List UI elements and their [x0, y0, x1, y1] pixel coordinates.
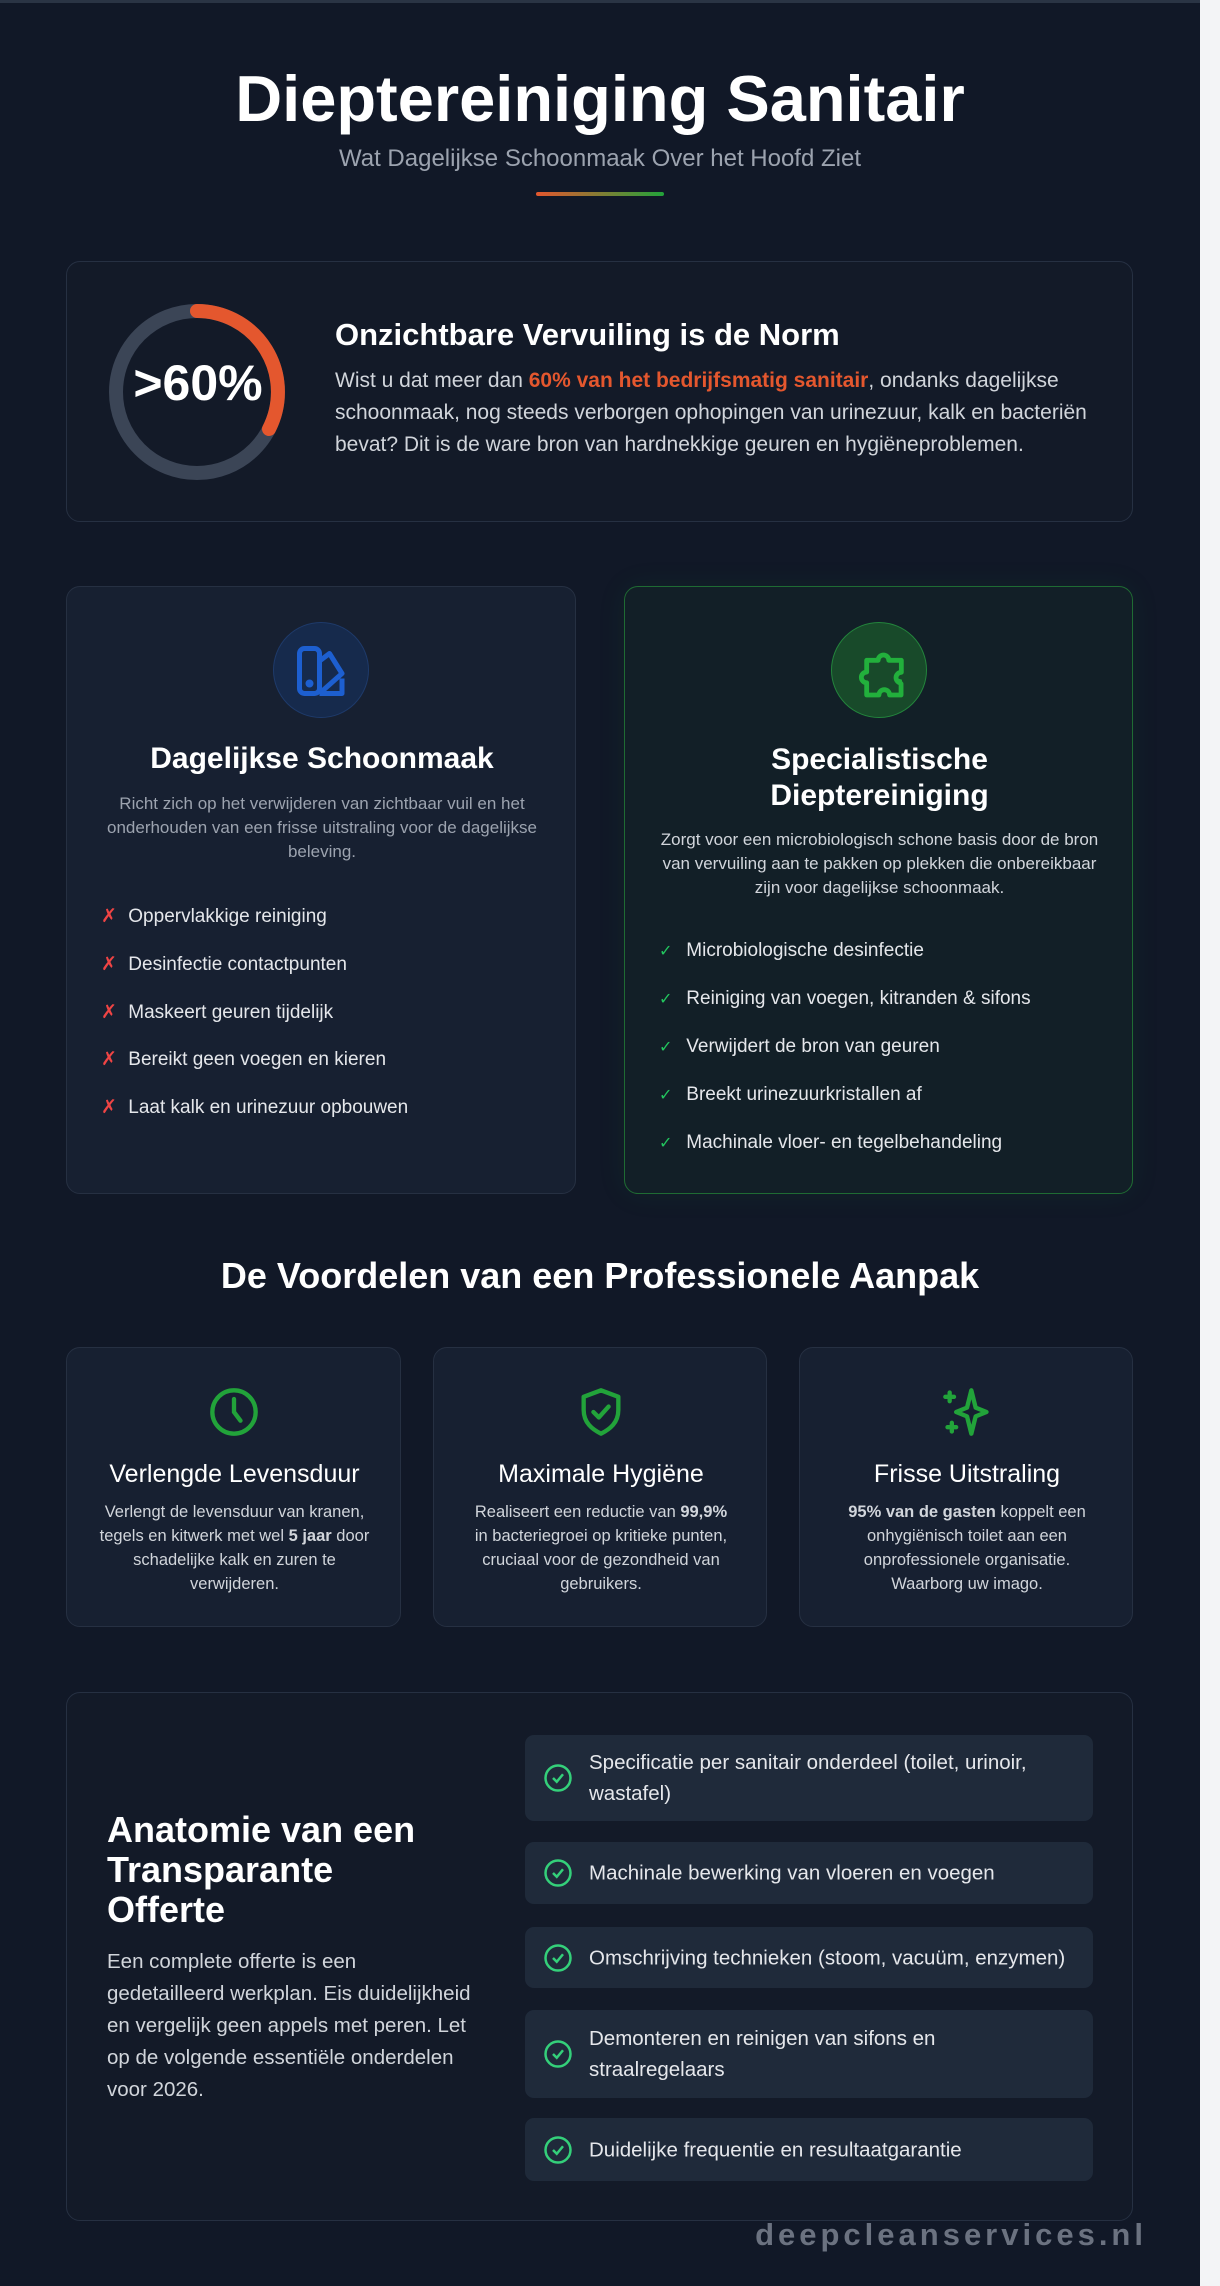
icon: clock	[210, 1388, 258, 1436]
list: negatives: ✗	[101, 1097, 117, 1118]
list: positives: Verwijdert de bron van geuren	[686, 1036, 940, 1057]
checklist: Machinale bewerking van vloeren en voegen	[589, 1862, 995, 1884]
offerte heading	[107, 1809, 415, 1930]
list: positives: ✓	[659, 1039, 672, 1056]
list: positives: Reiniging van voegen, kitranden & sifons	[686, 988, 1031, 1009]
heading: Dagelijkse Schoonmaak	[150, 742, 494, 775]
text: in bacteriegroei op kritieke punten, cruciaal voor de gezondheid van gebruikers.	[475, 1527, 727, 1593]
icon: sparkles	[943, 1388, 989, 1436]
icon: puzzle	[831, 622, 927, 718]
title: Maximale Hygiëne	[498, 1460, 704, 1488]
checklist	[525, 1735, 1093, 2181]
list: positives: ✓	[659, 1087, 672, 1104]
list: negatives: Desinfectie contactpunten	[128, 954, 347, 975]
list: negatives: Bereikt geen voegen en kieren	[128, 1049, 386, 1070]
checklist: Omschrijving technieken (stoom, vacuüm, enzymen)	[589, 1946, 1065, 1969]
title: Dieptereiniging Sanitair	[235, 62, 965, 135]
list: positives: ✓	[659, 1135, 672, 1152]
panel: stat	[66, 261, 1133, 522]
panel: levensduur	[66, 1347, 401, 1627]
list: positives: Machinale vloer- en tegelbehandeling	[686, 1132, 1002, 1153]
panel: uitstraling	[799, 1347, 1133, 1627]
text: Realiseert een reductie van 99,9%	[475, 1503, 727, 1521]
offerte text: gedetailleerd werkplan. Eis duidelijkheid en vergelijk geen appels met peren. Let op de volgende essentiële onderdelen voor 2026.	[107, 1982, 471, 2101]
checklist: Duidelijke frequentie en resultaatgarantie	[589, 2138, 962, 2161]
checklist: Demonteren en reinigen van sifons en	[589, 2027, 935, 2050]
section heading: De Voordelen van een Professionele Aanpak	[221, 1255, 979, 1296]
icon: shield	[582, 1388, 620, 1436]
title underline	[536, 192, 664, 196]
chart: ring 60%: >60%	[133, 355, 263, 411]
text: 95% van de gasten koppelt een onhygiënisch toilet aan een onprofessionele organisatie. Waarborg uw imago.	[848, 1503, 1086, 1593]
panel: offerte	[66, 1692, 1133, 2221]
list: negatives: ✗	[101, 1002, 117, 1023]
panel: hygiene	[433, 1347, 767, 1627]
list: negatives: Maskeert geuren tijdelijk	[128, 1002, 333, 1023]
list: negatives: ✗	[101, 954, 117, 975]
list: positives	[659, 940, 1031, 1153]
text: Verlengt de levensduur van kranen, tegels en kitwerk met wel 5 jaar door schadelijke kalk en zuren te verwijderen.	[100, 1503, 369, 1593]
list: negatives: ✗	[101, 906, 117, 927]
list: positives: ✓	[659, 943, 672, 960]
icon: swatch	[273, 622, 369, 718]
list: negatives: Laat kalk en urinezuur opbouwen	[128, 1097, 408, 1118]
offerte text: Een complete offerte is een	[107, 1950, 356, 1973]
chart: ring 60%	[109, 304, 285, 480]
description: Zorgt voor een microbiologisch schone basis door de bron van vervuiling aan te pakken op plekken die onbereikbaar zijn voor dagelijkse schoonmaak.	[661, 830, 1098, 897]
offerte heading: Anatomie van een	[107, 1809, 415, 1850]
offerte heading: Offerte	[107, 1889, 225, 1930]
heading	[770, 743, 989, 812]
subtitle: Wat Dagelijkse Schoonmaak Over het Hoofd Ziet	[339, 145, 861, 172]
heading: Dieptereiniging	[770, 779, 989, 812]
title: Verlengde Levensduur	[109, 1460, 360, 1488]
checklist: Specificatie per sanitair onderdeel (toilet, urinoir, wastafel)	[589, 1751, 1027, 1805]
list: positives: Breekt urinezuurkristallen af	[686, 1084, 922, 1105]
description: Richt zich op het verwijderen van zichtbaar vuil en het onderhouden van een frisse uitstraling voor de dagelijkse beleving.	[107, 794, 537, 861]
footer brand: deepcleanservices.nl	[755, 2217, 1147, 2252]
list: negatives: Oppervlakkige reiniging	[128, 906, 327, 927]
stat text: Wist u dat meer dan 60% van het bedrijfsmatig sanitair, ondanks dagelijkse schoonmaak, nog steeds verborgen ophopingen van urinezuur, kalk en bacteriën bevat? Dit is de ware bron van hardnekkige geuren en hygiëneproblemen.	[335, 369, 1087, 456]
panel: specialistische dieptereiniging	[624, 586, 1133, 1194]
offerte heading: Transparante	[107, 1849, 333, 1890]
panel: dagelijkse schoonmaak	[66, 586, 576, 1194]
list: positives: Microbiologische desinfectie	[686, 940, 924, 961]
list: positives: ✓	[659, 991, 672, 1008]
list: negatives: ✗	[101, 1049, 117, 1070]
checklist: straalregelaars	[589, 2058, 725, 2081]
list: negatives	[101, 906, 408, 1118]
stat heading: Onzichtbare Vervuiling is de Norm	[335, 317, 840, 352]
heading: Specialistische	[771, 743, 988, 776]
title: Frisse Uitstraling	[874, 1460, 1060, 1488]
